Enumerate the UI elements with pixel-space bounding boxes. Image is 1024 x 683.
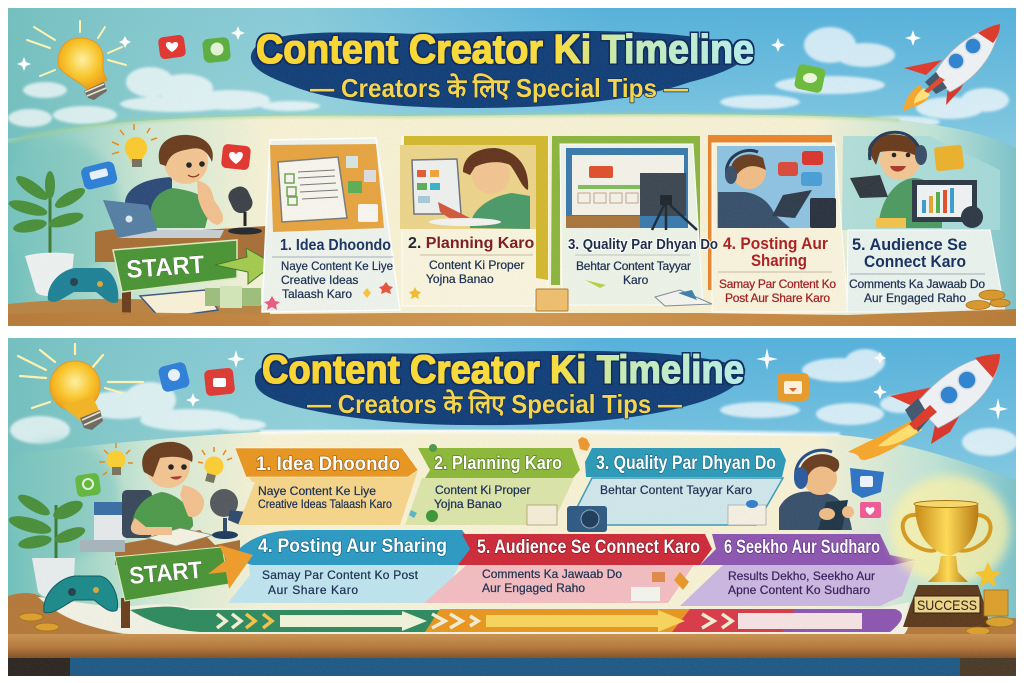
- sticky note and papers: [536, 280, 712, 311]
- person with tablet: [718, 150, 836, 228]
- arrow: [280, 611, 427, 631]
- card 4: Posting Aur Sharing: [708, 135, 848, 312]
- decoration: star sparkles: [186, 348, 1008, 420]
- coins: [19, 613, 59, 631]
- desk: [115, 530, 240, 565]
- title text: Content Creator Ki Timeline: [262, 348, 744, 392]
- illustration: boy at desk: [0, 440, 246, 598]
- books: [80, 502, 126, 552]
- icon: small bulb left: [99, 443, 133, 475]
- START sign: START: [125, 251, 205, 284]
- step description: Naye Content Ke Liye: [258, 484, 376, 498]
- step description: Samay Par Content Ko Post: [262, 568, 419, 582]
- teal wash: [48, 141, 123, 268]
- step title: 1. Idea Dhoondo: [280, 237, 391, 254]
- step description: Karo: [623, 273, 649, 287]
- girl planning: [412, 148, 530, 229]
- step description: Behtar Content Tayyar Karo: [600, 483, 752, 497]
- arm and hand: [197, 180, 223, 225]
- icon: red video badge: [204, 368, 235, 396]
- step description: Naye Content Ke Liye: [281, 259, 393, 273]
- card 5: Audience Se Connect Karo: [842, 132, 1005, 312]
- paper grain: [8, 8, 1016, 326]
- success plate: SUCCESS: [917, 597, 977, 613]
- icon: small bulb: [112, 124, 157, 167]
- arrow: [208, 545, 253, 589]
- step description: Creative Ideas Talaash Karo: [258, 497, 392, 511]
- step title: [723, 234, 828, 270]
- icon: green badge: [75, 472, 101, 498]
- cream content band: [8, 430, 1016, 640]
- chevrons: [217, 614, 732, 628]
- desk surface left and right: [8, 593, 1016, 640]
- step title: 3. Quality Par Dhyan Do: [568, 236, 718, 253]
- step description: [576, 259, 691, 287]
- START sign: [113, 240, 274, 315]
- sky background: [8, 8, 1016, 148]
- step title: Connect Karo: [864, 252, 966, 271]
- panel: bottom banner: [0, 338, 1018, 676]
- step description: Behtar Content Tayyar: [576, 259, 691, 273]
- icon: blue chat badge: [81, 162, 118, 190]
- step 4: Posting Aur Sharing: [228, 530, 476, 603]
- icon: game controller: [48, 268, 118, 303]
- illustration: START sign and controller: START: [128, 557, 204, 590]
- open book: [147, 528, 213, 546]
- paper grain: [8, 338, 1016, 676]
- decoration: star sparkles: [17, 26, 921, 71]
- card 1: Idea Dhoondo: [262, 138, 400, 312]
- icon: plant: [7, 171, 88, 296]
- desk: [95, 226, 267, 262]
- step 2: Planning Karo: [405, 437, 590, 525]
- monitor and camera: [566, 155, 697, 230]
- icon: light bulb: [27, 21, 126, 100]
- step description: Talaash Karo: [282, 287, 352, 301]
- note cards: [631, 572, 689, 601]
- title text: Content Creator Ki Timeline: [256, 26, 754, 72]
- desk surface left: [8, 298, 270, 314]
- step description: Comments Ka Jawaab Do: [482, 567, 622, 581]
- step 1: Idea Dhoondo: [235, 448, 418, 525]
- sky background: [8, 338, 1018, 676]
- step description: [849, 277, 985, 305]
- icon: rocket: [903, 24, 1000, 112]
- step description: Post Aur Share Karo: [725, 291, 830, 305]
- step title: 2. Planning Karo: [408, 235, 534, 252]
- step 5: Audience Se Connect Karo: [424, 534, 712, 603]
- timeline progress bar: [38, 597, 910, 637]
- step title: [852, 235, 967, 271]
- wood shelf: [8, 309, 1016, 326]
- step description: Aur Engaged Raho: [864, 291, 966, 305]
- star: [975, 562, 1001, 587]
- stars: [264, 282, 393, 310]
- step description: [258, 484, 392, 511]
- card 2: Planning Karo: [400, 136, 548, 306]
- note and clover: [409, 437, 590, 525]
- icon: game controller: [44, 576, 118, 613]
- chair: [125, 177, 172, 215]
- body: [132, 492, 193, 532]
- wooden table: [8, 634, 1016, 676]
- step title: 3. Quality Par Dhyan Do: [596, 453, 776, 474]
- subtitle text: — Creators के लिए Special Tips —: [307, 389, 682, 419]
- step description: Aur Share Karo: [268, 583, 358, 597]
- step description: Content Ki Proper: [435, 483, 530, 497]
- step description: Apne Content Ko Sudharo: [728, 583, 870, 597]
- subtitle text: — Creators के लिए Special Tips —: [310, 73, 688, 103]
- step title: 5. Audience Se Connect Karo: [477, 537, 700, 558]
- step title: 4. Posting Aur: [723, 234, 828, 253]
- icon: red heart badge: [221, 144, 251, 170]
- step title: 4. Posting Aur Sharing: [258, 536, 447, 557]
- START sign: [115, 547, 229, 601]
- step description: [262, 568, 419, 597]
- head: [164, 148, 208, 184]
- panel: top banner: [0, 8, 1016, 326]
- arm: [131, 518, 172, 535]
- coins: [966, 290, 1010, 310]
- icon: orange badge: [777, 373, 809, 401]
- arrow: [486, 610, 685, 632]
- step title: 5. Audience Se: [852, 235, 967, 254]
- step description: Creative Ideas: [281, 273, 358, 287]
- step description: [426, 258, 524, 286]
- microphone: [228, 186, 262, 234]
- icon: blue badge: [157, 361, 191, 393]
- step description: Yojna Banao: [426, 272, 494, 286]
- icon: light bulb: [18, 344, 143, 430]
- step description: Comments Ka Jawaab Do: [849, 277, 985, 291]
- icon: trophy: [890, 475, 1014, 635]
- illustration: START sign and controller: [19, 545, 253, 631]
- creator with headphones and laptop: [850, 132, 983, 228]
- card 3: Quality Par Dhyan Do: [536, 136, 718, 311]
- microphone: [210, 489, 246, 539]
- step description: Samay Par Content Ko: [719, 277, 836, 291]
- step title: 1. Idea Dhoondo: [256, 454, 400, 475]
- icon: green video badge: [794, 63, 826, 94]
- step description: Content Ki Proper: [429, 258, 524, 272]
- title banner: [251, 26, 754, 108]
- title banner: [255, 348, 745, 425]
- coins: [966, 590, 1014, 635]
- step description: Yojna Banao: [434, 497, 502, 511]
- step description: [434, 483, 530, 511]
- icon: rocket: [848, 354, 1000, 460]
- icon: red heart badge: [158, 34, 186, 60]
- step description: Aur Engaged Raho: [482, 581, 585, 595]
- step 6: Seekho Aur Sudharo: [680, 534, 915, 606]
- camera and note: [567, 500, 766, 532]
- body: [150, 188, 211, 228]
- icon: small bulb right: [198, 447, 232, 483]
- illustration: boy at desk: [0, 124, 274, 318]
- icon: heart bubble: [860, 502, 881, 518]
- cream content band: [8, 114, 1016, 326]
- step title: 2. Planning Karo: [434, 453, 562, 473]
- icon: plant: [7, 491, 87, 598]
- step description: [482, 567, 622, 595]
- head: [146, 444, 190, 488]
- illustration: person with phone: [779, 450, 884, 530]
- step description: [728, 569, 875, 597]
- step title: Sharing: [751, 251, 807, 270]
- icon: green chat badge: [202, 37, 231, 63]
- notebook with checklist: [278, 156, 378, 222]
- step title: 6 Seekho Aur Sudharo: [724, 537, 880, 558]
- laptop: [103, 200, 160, 238]
- chair: [122, 490, 152, 538]
- step description: Results Dekho, Seekho Aur: [728, 569, 875, 583]
- icon: like bubble: [850, 468, 884, 498]
- arrow: [215, 247, 264, 285]
- step description: [719, 277, 836, 305]
- step description: [282, 261, 393, 298]
- step 3: Quality Par Dhyan Do: [567, 448, 786, 532]
- papers and cash: [138, 286, 261, 314]
